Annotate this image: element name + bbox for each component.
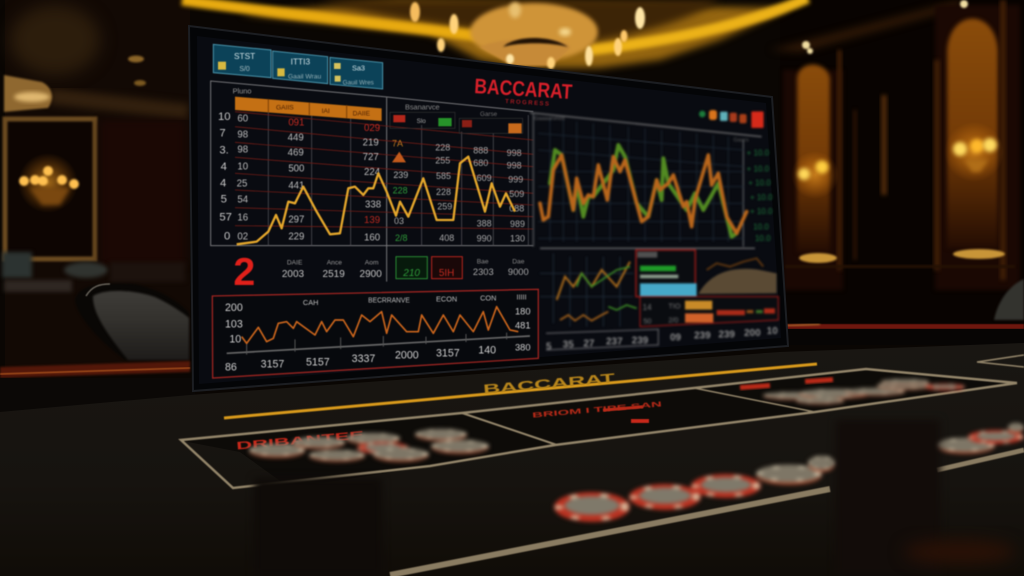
left table numbers: 3. (219, 144, 229, 156)
lower readout panel: TIO (668, 302, 681, 311)
orange table header: IAI (322, 108, 330, 115)
left table numbers: 57 (219, 212, 232, 224)
framed line chart panel: 3157 (436, 348, 460, 360)
bottom number strip (546, 326, 778, 352)
small panel with status bars (636, 250, 697, 297)
right table sub-header: Bsanarvce (405, 103, 440, 112)
data tables: 219 (363, 138, 379, 149)
brand title: TROGRESS (505, 99, 549, 108)
lower-left stat row (212, 250, 538, 378)
framed line chart panel: 2000 (395, 350, 419, 362)
framed line chart panel: ECON (436, 295, 457, 304)
right table numbers: 228 (393, 185, 408, 195)
yellow trend line over tables (237, 157, 515, 244)
right table numbers: 228 (435, 142, 450, 152)
lower readout panel: 2/0 (668, 316, 679, 325)
data tables: 54 (237, 195, 249, 206)
green axis labels: + 10.0 (750, 207, 773, 216)
table felt: BRIOM I TIPE SAN (532, 401, 662, 420)
framed line chart panel: 86 (225, 361, 237, 373)
analytics screen (189, 26, 788, 391)
stat readouts: Dae (512, 258, 525, 265)
green indicator: 210 (402, 268, 420, 279)
bottom number strip: 5 (546, 341, 552, 352)
ledge lights (799, 249, 1005, 263)
data tables: 029 (364, 123, 380, 134)
sconce: right (944, 122, 1004, 182)
leather chair (75, 283, 189, 360)
bottom number strip: 10 (767, 326, 778, 337)
bottom number strip: 27 (583, 339, 595, 350)
data tables: 338 (365, 200, 381, 211)
framed line chart panel: 103 (225, 318, 243, 330)
green axis labels: + 10.0 (747, 164, 770, 173)
button 3 (330, 57, 383, 89)
table title: BACCARAT (483, 370, 615, 397)
bottom number strip: 239 (694, 331, 711, 342)
reflection of chair (698, 269, 777, 294)
orange table header: DAIIE (353, 111, 371, 118)
framed line chart panel: IIIII (517, 292, 527, 301)
data tables: 98 (237, 129, 248, 140)
status indicator lights (699, 110, 764, 128)
screen bezel (189, 26, 788, 391)
green axis labels: 10.0 (753, 222, 769, 231)
gold line (224, 364, 817, 418)
data tables: 229 (288, 232, 304, 243)
green axis labels: + 10.0 (750, 193, 773, 202)
right table numbers: 255 (435, 156, 450, 166)
data tables: 160 (364, 232, 380, 243)
bottom number strip: 237 (606, 337, 623, 348)
lower readout panel: 50 (643, 316, 651, 325)
green indicator (396, 257, 427, 279)
orange table header (235, 97, 382, 121)
stat readouts: Aom (365, 260, 379, 267)
data tables: 469 (288, 148, 304, 159)
right wall: wood panels and sconces (770, 0, 1024, 325)
framed line chart panel: 200 (225, 302, 243, 314)
bottom number strip: 239 (718, 330, 735, 341)
framed line chart panel: BECRRANVE (368, 296, 410, 305)
bottom number strip: 239 (632, 335, 649, 346)
right-hand charts (530, 110, 778, 352)
spotlights (802, 0, 968, 54)
left room: ceiling, lamp, mirror and chair (2, 0, 190, 370)
chips: left betting box (249, 429, 489, 462)
stat readouts (282, 258, 529, 280)
left table numbers: 10 (218, 111, 231, 123)
table label: Pluno (233, 86, 251, 95)
button 2: Gaail Wrau (288, 73, 321, 80)
right table numbers: 7A (392, 138, 403, 148)
right table numbers: 888 (473, 146, 488, 156)
lower readout panel: 14 (643, 303, 652, 312)
framed line chart panel: 140 (478, 344, 496, 356)
chandelier (410, 2, 645, 69)
stat readouts: Bae (477, 258, 489, 265)
lower readout panel (640, 297, 778, 327)
right-hand charts: Gaaaarvnos (534, 116, 565, 122)
brand title: BACCARAT (474, 75, 573, 104)
right table numbers: 388 (477, 218, 492, 228)
right table numbers: 2/8 (395, 233, 407, 243)
right table numbers: 998 (507, 160, 522, 170)
stat readouts: 2003 (282, 269, 305, 280)
stat readouts: 2519 (323, 269, 345, 280)
data tables: 139 (364, 215, 380, 226)
right table numbers: 228 (436, 187, 451, 197)
framed line chart panel: CAH (303, 298, 318, 307)
main line chart frame (530, 113, 762, 248)
framed line chart panel: 5157 (306, 356, 330, 368)
red box labels: DRIBANTEE (236, 429, 364, 453)
data tables: 091 (288, 117, 304, 128)
right table sub-header: Garse (480, 111, 498, 118)
left table numbers: 7 (219, 127, 226, 139)
button 2 (273, 51, 328, 84)
framed line chart panel: 180 (515, 307, 531, 317)
stat readouts: 9000 (508, 267, 529, 277)
data tables: 98 (237, 145, 248, 156)
data tables: 16 (237, 213, 248, 224)
chips: far betting box (763, 379, 965, 404)
table felt (0, 343, 1024, 576)
right table numbers: 585 (436, 171, 451, 181)
right table numbers: 239 (393, 170, 408, 180)
bottom number strip: 200 (744, 328, 761, 339)
mirror frame (5, 119, 185, 265)
data tables (211, 81, 533, 282)
chips: front row (554, 423, 1024, 522)
small line chart (540, 253, 637, 327)
foreground blurred chip stacks (254, 420, 1016, 576)
stat readouts: 2303 (473, 267, 494, 277)
far chair (994, 279, 1024, 320)
right table numbers: 259 (437, 202, 452, 212)
bottom number strip: 35 (563, 340, 574, 351)
left table numbers: 4 (221, 161, 227, 173)
background table and chairs (2, 252, 32, 278)
green axis labels (747, 148, 773, 243)
stat readouts: 2900 (360, 269, 382, 280)
data tables: 449 (288, 133, 304, 144)
button 3: Gauil Wres (343, 79, 374, 86)
right table numbers (392, 138, 525, 244)
framed line chart panel: CON (480, 293, 496, 302)
right table numbers: 609 (477, 173, 492, 183)
right table sub-header: Slo (417, 118, 426, 125)
data tables: 10 (237, 161, 248, 172)
green axis labels: + 10.0 (748, 179, 771, 188)
data tables: 500 (288, 164, 304, 175)
table rails (0, 324, 1024, 412)
data tables: 60 (237, 113, 248, 124)
right-hand charts: Gaars (733, 138, 749, 144)
orange table header: GAIIS (276, 105, 294, 112)
screen surface (197, 36, 781, 384)
button 3: Sa3 (352, 63, 365, 72)
bottom number strip: 09 (670, 333, 682, 344)
right table numbers: 680 (473, 158, 488, 168)
red indicator: 5IH (439, 268, 454, 279)
green line (550, 145, 737, 237)
left table numbers: 0 (224, 230, 230, 242)
data tables: 02 (237, 231, 248, 242)
left table numbers: 4 (220, 178, 226, 190)
right table numbers: 03 (394, 216, 404, 226)
framed line chart panel: 3157 (261, 358, 284, 370)
right table numbers: 408 (439, 233, 454, 243)
button 1: S/0 (239, 66, 250, 73)
left table numbers: 5 (221, 194, 227, 206)
big red digit: 2 (233, 250, 255, 294)
sconce: left (791, 151, 839, 199)
green axis labels: + 10.0 (747, 148, 770, 157)
right table numbers: 989 (510, 219, 525, 229)
ceiling with gold cove lighting (182, 0, 808, 68)
framed line chart panel: 481 (515, 321, 531, 331)
right table numbers: 999 (508, 174, 523, 184)
data tables: 297 (288, 214, 304, 225)
framed line chart panel (212, 289, 538, 378)
red indicator (432, 257, 462, 279)
ceiling lamp (4, 75, 52, 112)
top stat buttons (213, 44, 383, 89)
left table numbers (218, 111, 232, 242)
framed line chart panel: 10 (229, 334, 241, 346)
framed line chart panel: 3337 (352, 353, 375, 365)
table frames and grid (211, 81, 533, 282)
stat readouts: DAIE (287, 260, 303, 267)
right table numbers: 998 (507, 148, 522, 158)
button 1: STST (234, 51, 255, 61)
right table numbers: 088 (509, 204, 524, 214)
betting layout outlines (181, 355, 1024, 575)
orange line (540, 155, 747, 233)
data tables: 727 (363, 152, 379, 163)
data tables: 25 (237, 178, 247, 189)
data tables: 441 (288, 180, 304, 191)
green axis labels: 10.0 (755, 234, 771, 243)
right table sub-header (390, 103, 523, 133)
framed line chart panel: 380 (515, 342, 531, 352)
right table numbers: 130 (510, 234, 525, 244)
right table numbers: 990 (477, 234, 492, 244)
right table numbers: 509 (509, 189, 524, 199)
button 2: ITTI3 (291, 56, 310, 66)
stat readouts: Ance (327, 260, 342, 267)
data tables: 224 (364, 167, 381, 178)
button 1 (213, 44, 271, 78)
